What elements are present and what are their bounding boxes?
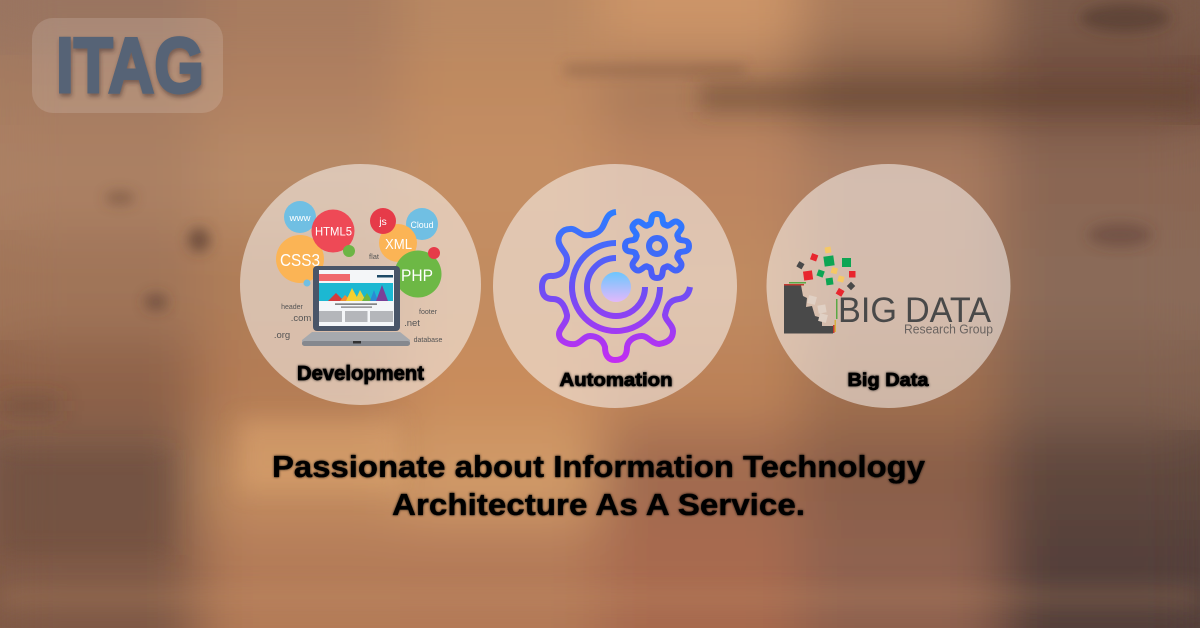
headline: Architecture As A Service.	[392, 487, 805, 522]
illustration: technology bubbles and laptop: CSS3	[280, 250, 320, 270]
panel: automation	[493, 164, 737, 408]
headline	[272, 449, 926, 522]
illustration: technology bubbles and laptop: header	[281, 304, 304, 311]
illustration: technology bubbles and laptop: js	[378, 216, 387, 228]
illustration: technology bubbles and laptop: .net	[404, 318, 420, 329]
illustration: technology bubbles and laptop: Cloud	[410, 220, 434, 231]
illustration: technology bubbles and laptop	[274, 201, 443, 346]
headline: Passionate about Information Technology	[272, 449, 926, 484]
icon: gears	[542, 212, 690, 360]
panel: big data	[766, 164, 1010, 408]
label: big data: Big Data	[848, 370, 930, 390]
logo: big data research group	[784, 247, 993, 336]
illustration: technology bubbles and laptop: XML	[385, 236, 412, 253]
illustration: technology bubbles and laptop: flat	[369, 252, 380, 261]
panel: development	[240, 164, 481, 405]
logo: big data research group: DATA	[905, 291, 992, 330]
illustration: technology bubbles and laptop: HTML5	[315, 224, 352, 238]
illustration: technology bubbles and laptop: footer	[419, 309, 438, 316]
label: development: Development	[297, 363, 424, 385]
logo: big data research group: Research Group	[904, 322, 993, 336]
illustration: technology bubbles and laptop: PHP	[401, 266, 433, 285]
label: automation: Automation	[560, 370, 672, 390]
illustration: technology bubbles and laptop: .org	[274, 330, 290, 341]
logo: big data research group: BIG	[838, 291, 897, 330]
logo: ITAG: ITAG	[56, 21, 204, 109]
illustration: technology bubbles and laptop: database	[414, 337, 443, 344]
illustration: technology bubbles and laptop: .com	[291, 313, 311, 324]
illustration: technology bubbles and laptop: www	[288, 213, 311, 224]
